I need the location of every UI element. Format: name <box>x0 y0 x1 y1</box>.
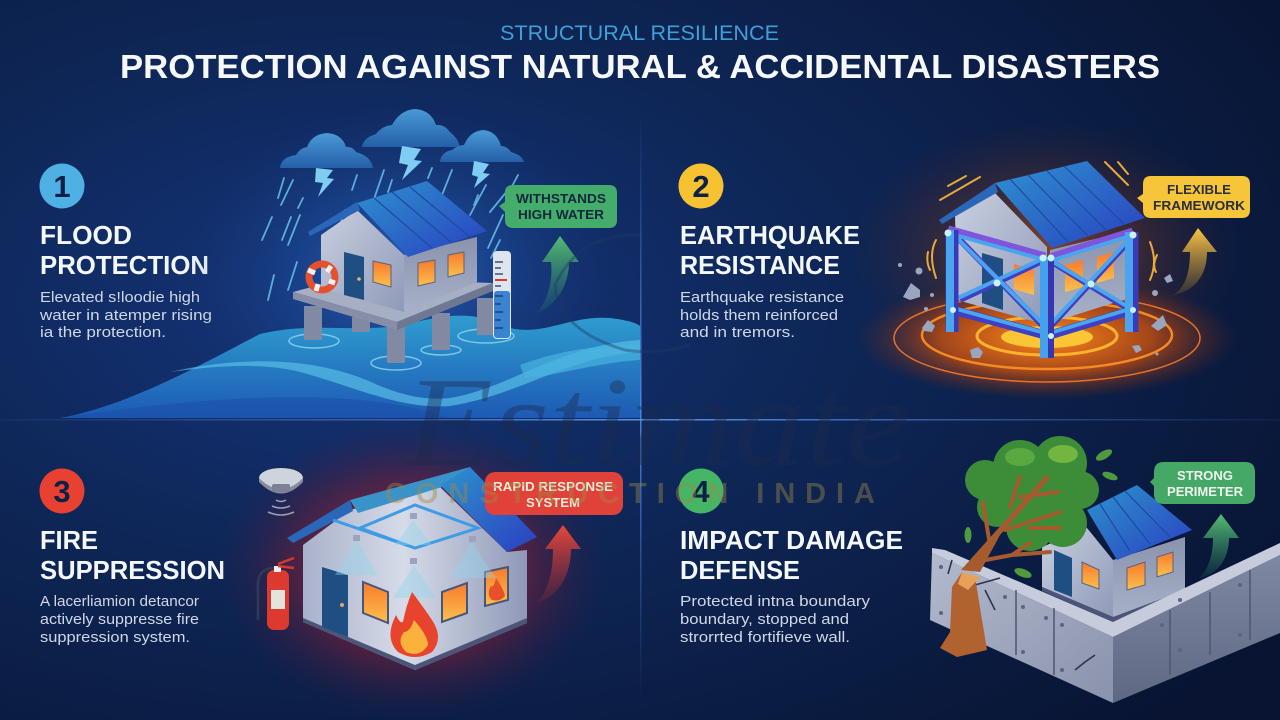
sprinkler pipes <box>333 505 478 548</box>
roof <box>287 500 353 543</box>
body text: fire: actively suppresse fire <box>40 611 199 628</box>
house walls <box>303 487 527 670</box>
arrow: rising green <box>537 236 579 313</box>
number badge 3 <box>40 468 84 514</box>
heading: fire suppression <box>40 525 225 585</box>
arrow: green <box>1199 514 1239 578</box>
door and windows <box>344 252 364 300</box>
body text: flood: water in atemper rising <box>39 307 212 324</box>
heading: impact damage defense: DEFENSE <box>680 555 800 585</box>
watermark logo: Estimate <box>403 351 910 493</box>
callout: rapid response system: RAPID RESPONSE <box>493 479 613 494</box>
tree foliage <box>965 436 1099 551</box>
loose leaves <box>964 447 1119 580</box>
house roof <box>995 161 1145 248</box>
panel: impact text <box>678 468 903 646</box>
heading: flood protection: FLOOD <box>40 220 132 250</box>
icon: storm clouds <box>280 109 524 168</box>
body text: fire: suppression system. <box>40 629 190 646</box>
heading: impact damage defense <box>680 525 903 585</box>
watermark logo <box>403 235 910 493</box>
number badge 3: 3 <box>53 474 71 509</box>
perimeter wall <box>930 543 1280 703</box>
illustration: earthquake frame <box>850 120 1250 400</box>
callout: strong perimeter: STRONG <box>1177 468 1233 483</box>
watermark text: CONSTRUCTION INDIA <box>385 478 875 510</box>
illustration: flood house <box>60 105 640 435</box>
callout: rapid response system: SYSTEM <box>526 495 580 510</box>
fallen tree trunk <box>940 475 1060 657</box>
heading: earthquake resistance <box>680 220 860 280</box>
body text: impact: Protected intna boundary <box>680 593 871 610</box>
body text: flood: Elevated s!loodie high <box>40 289 200 306</box>
callout: flexible framework: FLEXIBLE <box>1167 182 1231 197</box>
illustration: impact defense <box>930 436 1280 703</box>
rocks and debris <box>898 263 1173 358</box>
subtitle: STRUCTURAL RESILIENCE <box>500 22 779 45</box>
rain <box>262 168 518 300</box>
small flame <box>489 578 505 600</box>
glow joints <box>944 230 1136 339</box>
callout: rapid response system <box>485 472 623 515</box>
callout: withstands high water: HIGH WATER <box>518 207 605 222</box>
heading: fire suppression: SUPPRESSION <box>40 555 225 585</box>
panel: flood protection text <box>39 164 212 341</box>
house walls <box>321 210 404 312</box>
house roof <box>357 181 487 257</box>
body text: flood <box>39 289 212 341</box>
icon: lightning bolts <box>315 146 490 197</box>
body text: earthquake: and in tremors. <box>680 324 795 341</box>
heading: earthquake resistance: EARTHQUAKE <box>680 220 860 250</box>
heading: flood protection <box>40 220 209 280</box>
deck <box>293 278 493 322</box>
icon: smoke detector <box>259 468 303 515</box>
number badge 1 <box>40 164 84 208</box>
water sprays <box>335 520 496 598</box>
callout: flexible framework <box>1137 176 1250 218</box>
body text: earthquake: holds them reinforced <box>680 307 838 324</box>
illustration: fire house <box>218 420 623 720</box>
number badge 2: 2 <box>692 169 710 204</box>
door and windows <box>322 567 348 637</box>
body text: earthquake: Earthquake resistance <box>680 289 844 306</box>
stilts <box>304 298 495 363</box>
heading: flood protection: PROTECTION <box>40 250 209 280</box>
body text: impact: boundary, stopped and <box>680 611 849 628</box>
body text: earthquake <box>680 289 844 341</box>
number badge 2 <box>678 164 724 208</box>
panel: fire text <box>40 468 225 646</box>
body text: fire <box>40 593 199 646</box>
number badge 4 <box>678 468 724 514</box>
vibration marks <box>927 162 1157 280</box>
body text: flood: ia the protection. <box>40 324 166 341</box>
water waves <box>60 316 640 418</box>
body text: impact: strorrted fortifieve wall. <box>680 629 850 646</box>
callout: withstands high water: WITHSTANDS <box>516 191 606 206</box>
panel: earthquake text <box>678 164 860 341</box>
body text: impact <box>680 593 871 646</box>
icon: water gauge <box>493 251 511 339</box>
arrow: red <box>537 525 581 603</box>
steel frame <box>948 230 1133 358</box>
heading: fire suppression: FIRE <box>40 525 98 555</box>
callout: strong perimeter: PERIMETER <box>1167 484 1244 499</box>
title: PROTECTION AGAINST NATURAL & ACCIDENTAL DISASTERS <box>120 48 1160 85</box>
callout: withstands high water <box>499 185 617 228</box>
heading: earthquake resistance: RESISTANCE <box>680 250 840 280</box>
arrow: yellow <box>1173 228 1217 295</box>
body text: fire: A lacerliamion detancor <box>40 593 199 610</box>
icon: flame <box>390 592 438 657</box>
number badge 1: 1 <box>53 169 71 204</box>
icon: fire extinguisher <box>258 558 294 630</box>
shockwave rings <box>894 294 1200 382</box>
callout: flexible framework: FRAMEWORK <box>1153 198 1246 213</box>
heading: impact damage defense: IMPACT DAMAGE <box>680 525 903 555</box>
number badge 4: 4 <box>692 474 710 509</box>
small house <box>1042 485 1192 622</box>
callout: strong perimeter <box>1150 462 1255 504</box>
icon: life ring <box>308 264 335 291</box>
house walls <box>955 193 1047 325</box>
